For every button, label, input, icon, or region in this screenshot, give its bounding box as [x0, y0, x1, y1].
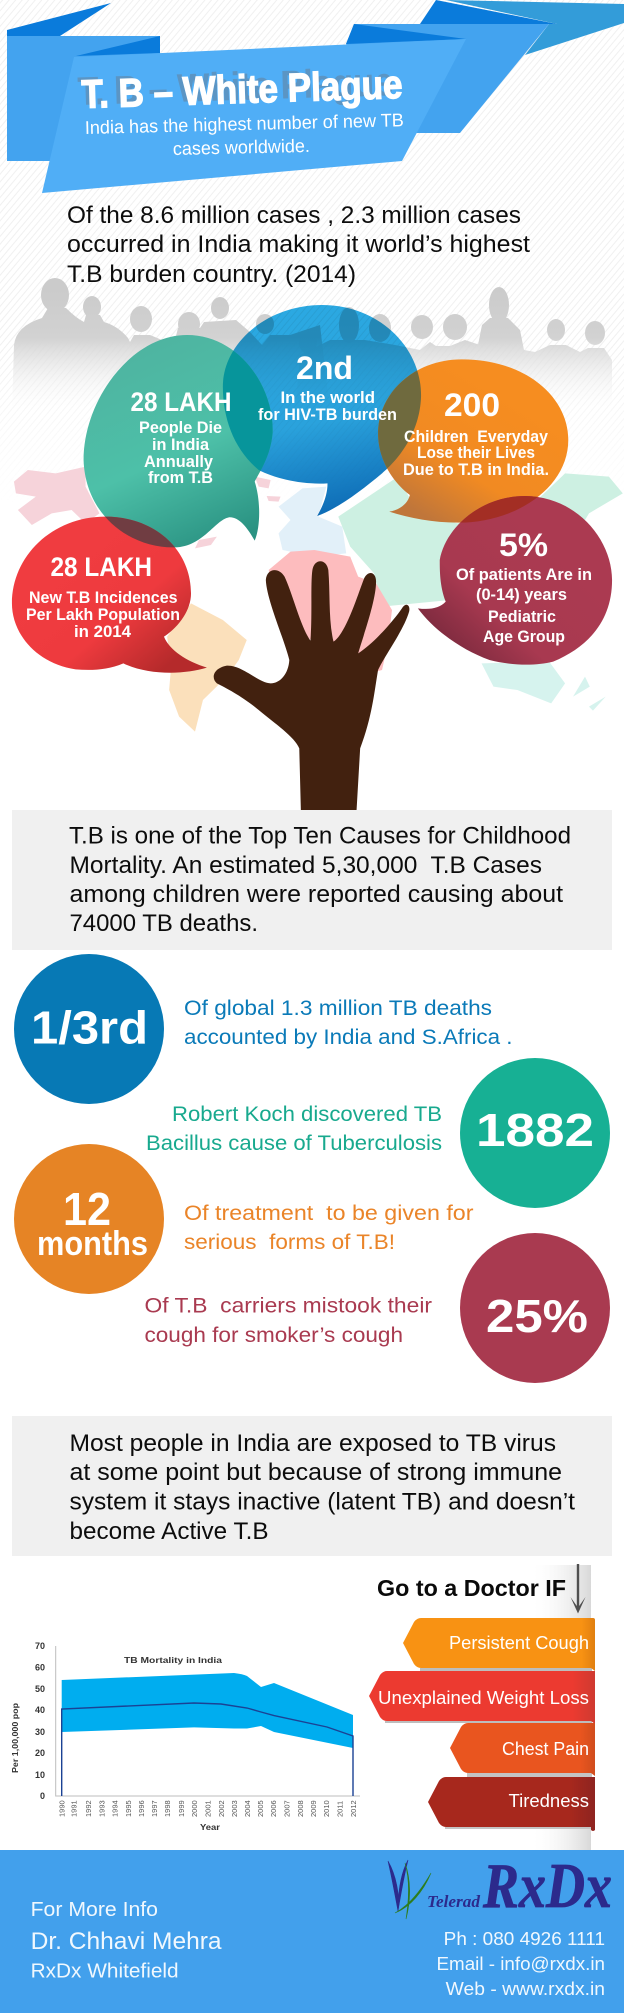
bubble text: deaths	[130, 387, 232, 487]
bubble text: incidences	[26, 552, 180, 641]
stat text: Bacillus cause of Tuberculosis	[146, 1131, 442, 1155]
contact details: Email - info@rxdx.in	[436, 1953, 605, 1974]
tag: persistent cough	[403, 1618, 595, 1671]
x axis labels: 1996	[137, 1800, 146, 1817]
x axis labels: 2010	[322, 1800, 331, 1817]
bubble text: children: Children Everyday	[404, 427, 548, 446]
icon: grass leaves	[388, 1860, 431, 1919]
bubble text: deaths: Annually	[144, 452, 214, 471]
bubble text: deaths: 28 LAKH	[130, 387, 232, 417]
y axis labels: 0	[40, 1791, 45, 1801]
bubble text: HIV-TB: In the world	[280, 388, 375, 407]
intro paragraph: T.B burden country. (2014)	[67, 261, 356, 288]
bubble overlap: green and blue	[222, 350, 273, 471]
stat: 25%	[144, 1233, 610, 1383]
bubble text: children: Due to T.B in India.	[403, 460, 549, 479]
intro paragraph: Of the 8.6 million cases , 2.3 million cases	[67, 202, 521, 229]
panel: childhood mortality	[12, 810, 612, 950]
map: south america	[167, 603, 247, 732]
x axis labels: 2003	[230, 1800, 239, 1817]
x axis labels	[58, 1800, 358, 1817]
x axis labels: 1997	[150, 1800, 159, 1817]
world map and bubbles	[12, 305, 623, 810]
bubble text: deaths: from T.B	[148, 468, 213, 487]
x axis labels: 1995	[124, 1800, 133, 1817]
stat: 25%: 25%	[486, 1290, 588, 1342]
logo	[388, 1850, 612, 1921]
bubble text: pediatric: Pediatric	[488, 607, 556, 626]
map: australia	[482, 662, 606, 711]
y axis labels: 30	[35, 1727, 45, 1737]
bubble text: incidences: in 2014	[74, 622, 132, 641]
map: north america	[14, 467, 281, 548]
stat text	[146, 1102, 442, 1155]
panel text	[70, 1430, 575, 1545]
x axis title: Year	[200, 1822, 221, 1832]
bubble text: incidences: New T.B Incidences	[29, 588, 178, 607]
panel text: at some point but because of strong immune	[70, 1459, 562, 1486]
bubble overlap: blue and orange	[378, 370, 422, 468]
panel text: Mortality. An estimated 5,30,000 T.B Cases	[70, 852, 542, 879]
bubble: HIV-TB	[223, 305, 421, 516]
panel text: Most people in India are exposed to TB virus	[70, 1430, 556, 1457]
contact person: For More Info	[31, 1899, 158, 1921]
stat: 12 months	[14, 1144, 474, 1294]
bubble: deaths	[84, 335, 273, 547]
contact person: RxDx Whitefield	[31, 1960, 179, 1982]
bubble text: deaths: in India	[152, 435, 210, 454]
stat text: serious forms of T.B!	[184, 1230, 395, 1254]
tag: unexplained weight loss	[369, 1671, 595, 1724]
panel text: system it stays inactive (latent TB) and doesn’t	[70, 1488, 575, 1516]
stat text	[184, 996, 512, 1049]
tag: chest pain: Chest Pain	[502, 1739, 589, 1759]
stat: 1882: 1882	[476, 1104, 594, 1156]
bubble text: children: 200	[444, 387, 500, 423]
x axis labels: 1994	[110, 1800, 120, 1817]
tag: tiredness	[428, 1777, 595, 1831]
x axis labels: 2006	[269, 1800, 278, 1817]
bubble text: incidences: Per Lakh Population	[26, 605, 180, 624]
x axis labels: 2011	[336, 1801, 344, 1817]
subtitle: cases worldwide.	[173, 135, 310, 159]
x axis labels: 1999	[177, 1800, 186, 1817]
confidence band	[62, 1673, 353, 1748]
footer	[0, 1850, 624, 2013]
stat text: Of treatment to be given for	[184, 1201, 474, 1225]
bubble text: incidences: 28 LAKH	[50, 552, 152, 582]
bubble text: pediatric: (0-14) years	[476, 585, 567, 604]
map: asia	[338, 473, 623, 607]
contact details: Ph : 080 4926 1111	[444, 1928, 605, 1949]
mortality line	[62, 1703, 353, 1796]
bubble text: pediatric: Age Group	[483, 627, 565, 646]
bubble text: children	[403, 387, 549, 479]
stat text: cough for smoker’s cough	[144, 1323, 403, 1347]
tag: persistent cough: Persistent Cough	[449, 1633, 589, 1653]
bubble overlap: orange and maroon	[460, 496, 538, 522]
line chart: TB mortality in India	[10, 1641, 360, 1832]
x axis labels: 2009	[309, 1800, 318, 1817]
chart title: TB Mortality in India	[124, 1655, 222, 1665]
x axis labels: 1993	[98, 1800, 106, 1817]
title: T. B – White Plague	[81, 63, 403, 117]
contact person	[31, 1899, 222, 1982]
bubble text: HIV-TB	[258, 350, 397, 424]
bubble text: deaths: People Die	[139, 418, 222, 437]
bubble: pediatric	[418, 496, 612, 665]
intro paragraph: occurred in India making it world’s highest	[67, 231, 530, 258]
logo: Telerad	[427, 1892, 480, 1911]
y axis labels: 10	[35, 1770, 45, 1780]
panel: latent TB	[12, 1416, 612, 1556]
y axis labels: 50	[35, 1684, 45, 1694]
stat text: Of T.B carriers mistook their	[144, 1294, 432, 1318]
y axis labels: 40	[35, 1705, 45, 1715]
y axis labels: 20	[35, 1748, 45, 1758]
title shadow: T. B – White Plague	[77, 60, 394, 114]
bubble text: pediatric: Of patients Are in	[456, 565, 592, 584]
stat text: Of global 1.3 million TB deaths	[184, 996, 492, 1020]
x axis labels: 2001	[204, 1800, 212, 1817]
heading: go to a doctor: Go to a Doctor IF	[377, 1575, 566, 1601]
stat text: accounted by India and S.Africa .	[184, 1025, 512, 1049]
subtitle: India has the highest number of new TB	[85, 109, 404, 138]
panel text: become Active T.B	[70, 1518, 268, 1545]
panel text: 74000 TB deaths.	[70, 910, 258, 937]
stat text	[184, 1201, 474, 1254]
x axis labels: 2000	[190, 1800, 199, 1817]
contact person: Dr. Chhavi Mehra	[31, 1928, 222, 1955]
panel text: T.B is one of the Top Ten Causes for Childhood	[69, 822, 571, 850]
x axis labels: 2007	[282, 1800, 292, 1817]
doctor tags shadow	[530, 1565, 591, 1850]
background	[0, 0, 624, 417]
x axis labels: 1992	[84, 1800, 93, 1817]
bubble text: children: Lose their Lives	[417, 443, 535, 462]
x axis labels: 2004	[243, 1800, 252, 1817]
contact details: Web - www.rxdx.in	[446, 1978, 605, 1999]
tag: chest pain	[450, 1723, 595, 1777]
tag: tiredness: Tiredness	[508, 1791, 589, 1811]
map: africa	[269, 550, 392, 677]
stat text: Robert Koch discovered TB	[172, 1102, 442, 1126]
x axis labels: 1991	[70, 1800, 78, 1817]
stat: 12 months: months	[37, 1225, 148, 1263]
y axis title: Per 1,00,000 pop	[10, 1703, 20, 1773]
stat: 1882	[146, 1058, 610, 1208]
title ribbon	[7, 0, 624, 193]
bubble overlap: green and red	[105, 516, 175, 548]
crowd silhouettes	[12, 278, 612, 410]
map: europe	[279, 487, 346, 557]
stat: 1/3rd: 1/3rd	[31, 1002, 148, 1054]
bubble text: pediatric: 5%	[499, 527, 548, 563]
stat text	[144, 1294, 432, 1347]
x axis labels: 2008	[296, 1800, 305, 1817]
x axis labels: 2012	[349, 1800, 358, 1817]
stat: 12 months: 12	[63, 1183, 111, 1235]
subtitle	[85, 109, 404, 159]
stat: 1/3rd	[14, 954, 512, 1104]
bubble: children	[378, 359, 568, 523]
bubble text: HIV-TB: 2nd	[296, 350, 353, 386]
bubble text: HIV-TB: for HIV-TB burden	[258, 405, 397, 424]
x axis labels: 2005	[256, 1800, 265, 1817]
bubble text: pediatric	[456, 527, 592, 646]
panel text: among children were reported causing about	[70, 881, 563, 908]
y axis labels	[35, 1641, 45, 1801]
x axis labels: 1990	[58, 1800, 66, 1817]
y axis labels: 60	[35, 1662, 45, 1672]
y axis labels: 70	[35, 1641, 45, 1651]
tag: unexplained weight loss: Unexplained Weight Loss	[378, 1688, 589, 1708]
intro paragraph	[67, 202, 530, 288]
x axis labels: 2002	[217, 1800, 226, 1817]
bubble: incidences	[12, 517, 207, 673]
panel text	[69, 822, 571, 937]
hand	[214, 561, 409, 810]
arrow	[570, 1564, 586, 1614]
x axis labels: 1998	[163, 1800, 172, 1817]
contact details	[436, 1928, 605, 1999]
